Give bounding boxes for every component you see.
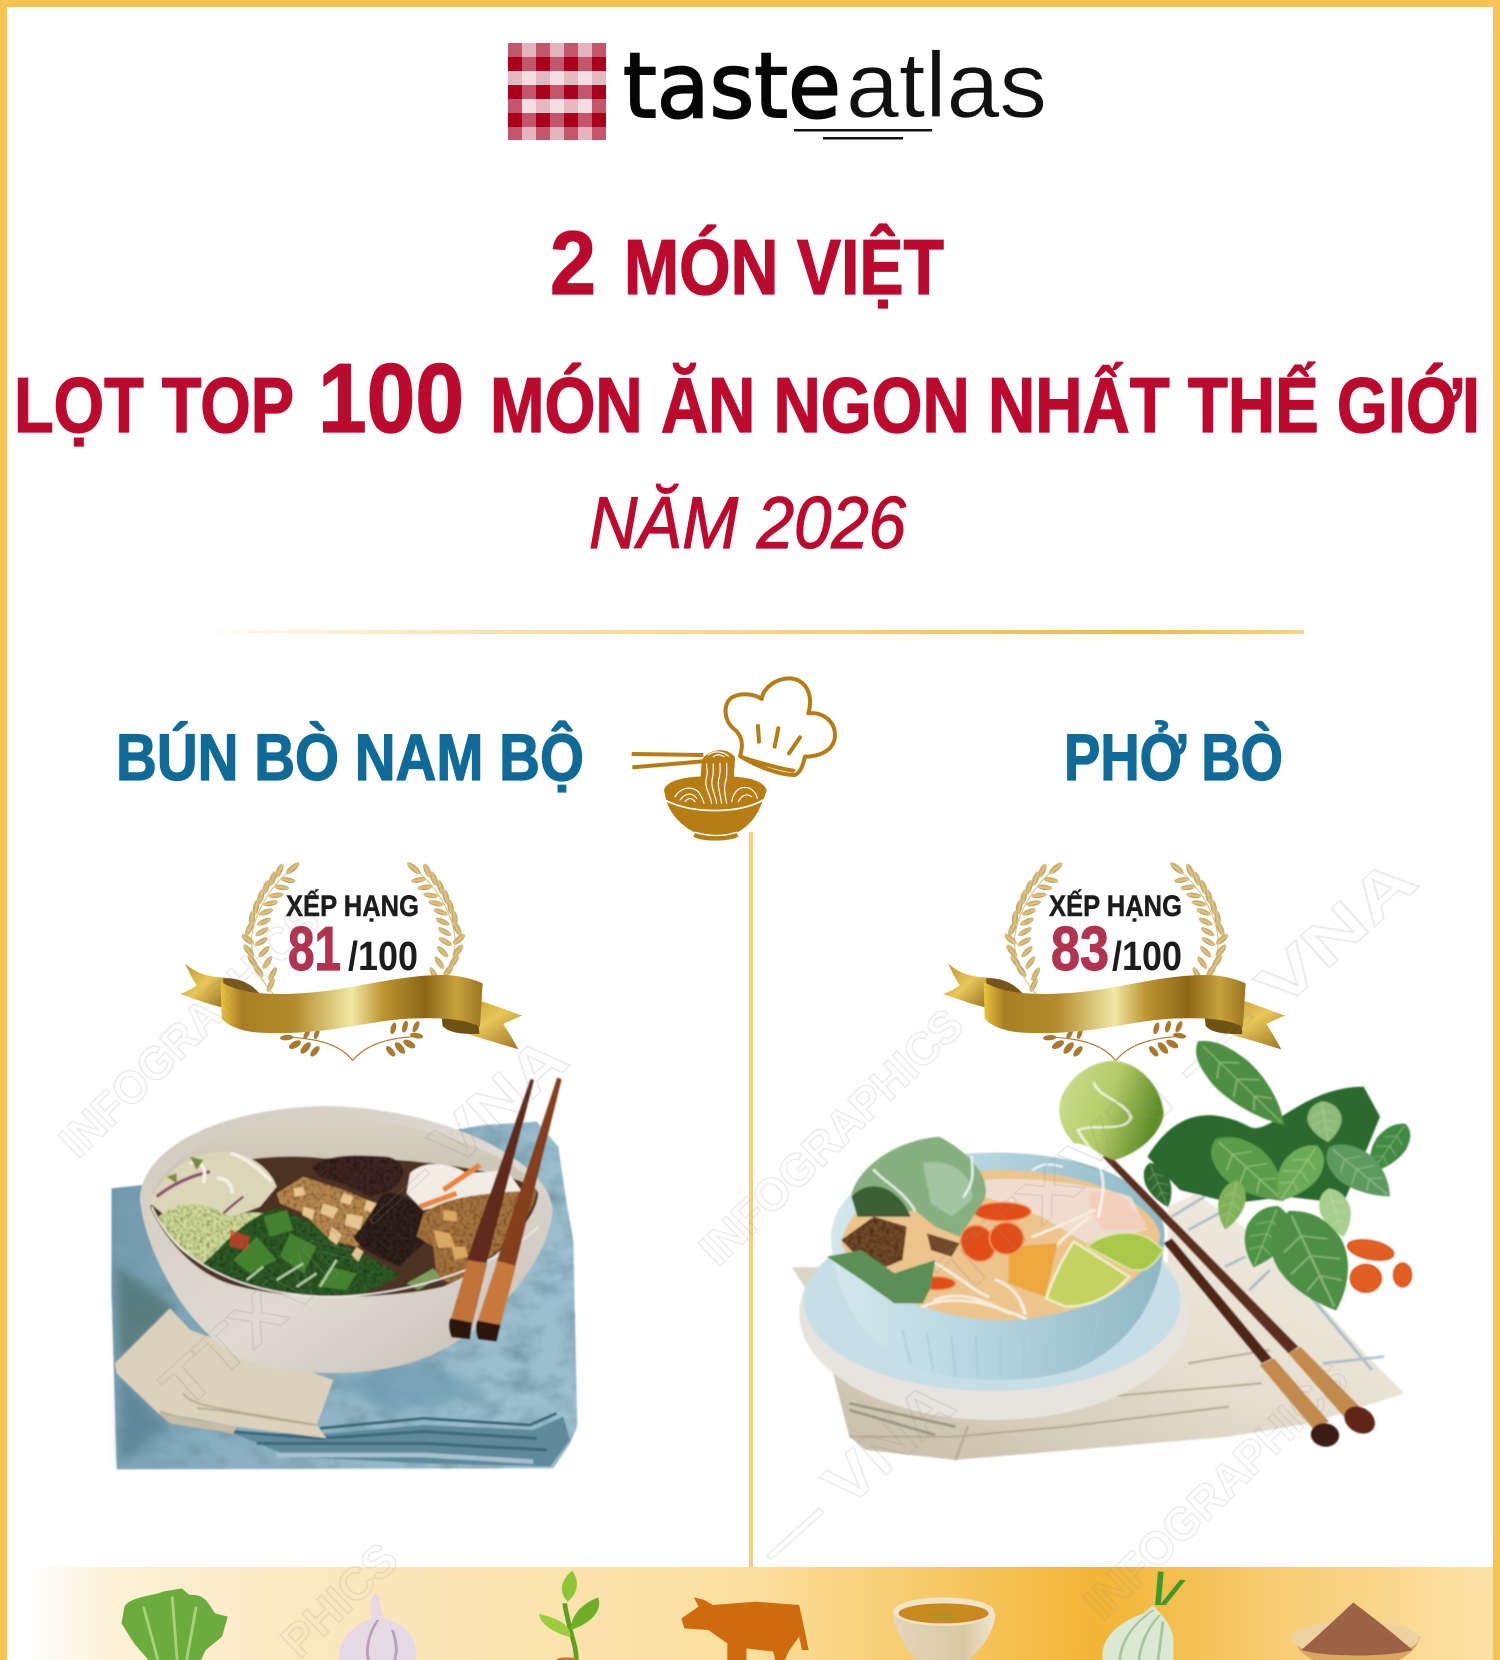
title line 1: MÓN VIỆT (624, 223, 944, 311)
noodles and toppings (827, 1137, 1164, 1318)
noodle strands (700, 750, 735, 787)
watermark bottom right: INFOGRAPHICS (1074, 1352, 1358, 1629)
logo wordmark (623, 33, 1047, 140)
icon: gingham square (508, 43, 606, 140)
bowl ribs (902, 1317, 1098, 1377)
rank number: 83 (1051, 915, 1109, 984)
icon: broth cup (893, 1597, 995, 1660)
herbs (203, 1208, 400, 1296)
badge: rank 81/100 (180, 860, 522, 1061)
rank number: 81 (288, 915, 341, 984)
chili slices on towel (1345, 1236, 1411, 1292)
rank total: /100 (1112, 933, 1182, 979)
greens top left (851, 1137, 986, 1237)
logo wordmark: atlas (846, 33, 1047, 137)
icon: cow (681, 1597, 809, 1660)
title line 2: 100 (318, 343, 464, 453)
towel (792, 1193, 1405, 1460)
noodles (666, 752, 763, 836)
icon: onion (1102, 1572, 1183, 1660)
logo: tasteatlas (508, 33, 1047, 140)
lime wedge 1 (1046, 1242, 1129, 1307)
beef (312, 1156, 437, 1267)
center vertical divider (749, 832, 753, 1568)
divider (200, 630, 1304, 634)
ingredient strip (7, 1567, 1493, 1660)
bowl (664, 776, 767, 841)
pickled carrot and daikon (407, 1164, 523, 1210)
title line 1: 2 (550, 214, 596, 314)
watermark left: INFOGRAPHICS (49, 894, 330, 1167)
title (14, 214, 1480, 564)
heading: Phở bò: PHỞ BÒ (1064, 720, 1283, 794)
plate inner (804, 1212, 1181, 1391)
watermark centre: INFOGRAPHICS (689, 998, 973, 1275)
icon: garlic (339, 1593, 417, 1660)
folded napkin edges (233, 1417, 570, 1467)
photo: bún bò Nam Bộ (112, 1077, 577, 1469)
chef hat (726, 678, 835, 775)
lime wedge 2 (1087, 1233, 1164, 1270)
title line 2: LỌT TOP (14, 361, 294, 449)
food base (150, 1156, 538, 1297)
steam (874, 1083, 1131, 1217)
title line 3: NĂM 2026 (589, 483, 906, 564)
icon: green sprout (539, 1571, 599, 1660)
mint bunch (1138, 1029, 1420, 1321)
chopsticks (1102, 1154, 1381, 1451)
icon: lettuce (122, 1588, 228, 1660)
chopsticks (632, 754, 735, 767)
laurel and ribbon (943, 860, 1285, 1061)
title line 2 (14, 343, 1480, 453)
bowl outer (140, 1106, 553, 1373)
dark cloth shading (117, 1267, 490, 1463)
fried onion (841, 1217, 907, 1267)
beige cloth (115, 1308, 333, 1438)
rank label: XẾP HẠNG (1049, 889, 1182, 923)
fried shallots (417, 1190, 537, 1283)
peanuts and pork (277, 1177, 383, 1262)
chili slices (919, 1202, 1031, 1290)
heading: Bún bò Nam Bộ: BÚN BÒ NAM BỘ (116, 720, 584, 794)
blue napkin (112, 1122, 577, 1469)
cucumber (407, 1268, 440, 1290)
ingredient icons (122, 1571, 1420, 1660)
soup (841, 1170, 1160, 1321)
rank total: /100 (348, 933, 418, 979)
photo: phở bò (792, 1029, 1420, 1460)
towel stripes (849, 1197, 1384, 1435)
logo wordmark: taste (623, 34, 841, 139)
watermark left photo: TTXVN — VNA (148, 1023, 581, 1422)
bowl inner wall (152, 1116, 538, 1247)
plate (799, 1207, 1189, 1420)
badge: rank 83/100 (943, 860, 1285, 1061)
watermark right top: TTXVN — VNA (923, 844, 1430, 1310)
chopsticks (449, 1077, 562, 1342)
laurel and ribbon (180, 860, 522, 1061)
rim shadow (152, 1207, 538, 1297)
icon: noodle bowl with chef hat (632, 678, 835, 841)
watermarks (49, 844, 1430, 1660)
icon: spice bowl (1291, 1603, 1420, 1660)
lettuce (158, 1204, 280, 1263)
bowl (831, 1153, 1165, 1380)
lime (1059, 1061, 1164, 1160)
mint in bowl (827, 1250, 935, 1303)
sprouts and onion (150, 1152, 277, 1223)
title line 1 (550, 214, 944, 314)
watermark bottom centre: — VNA (743, 1369, 968, 1580)
rank label: XẾP HẠNG (286, 889, 419, 923)
